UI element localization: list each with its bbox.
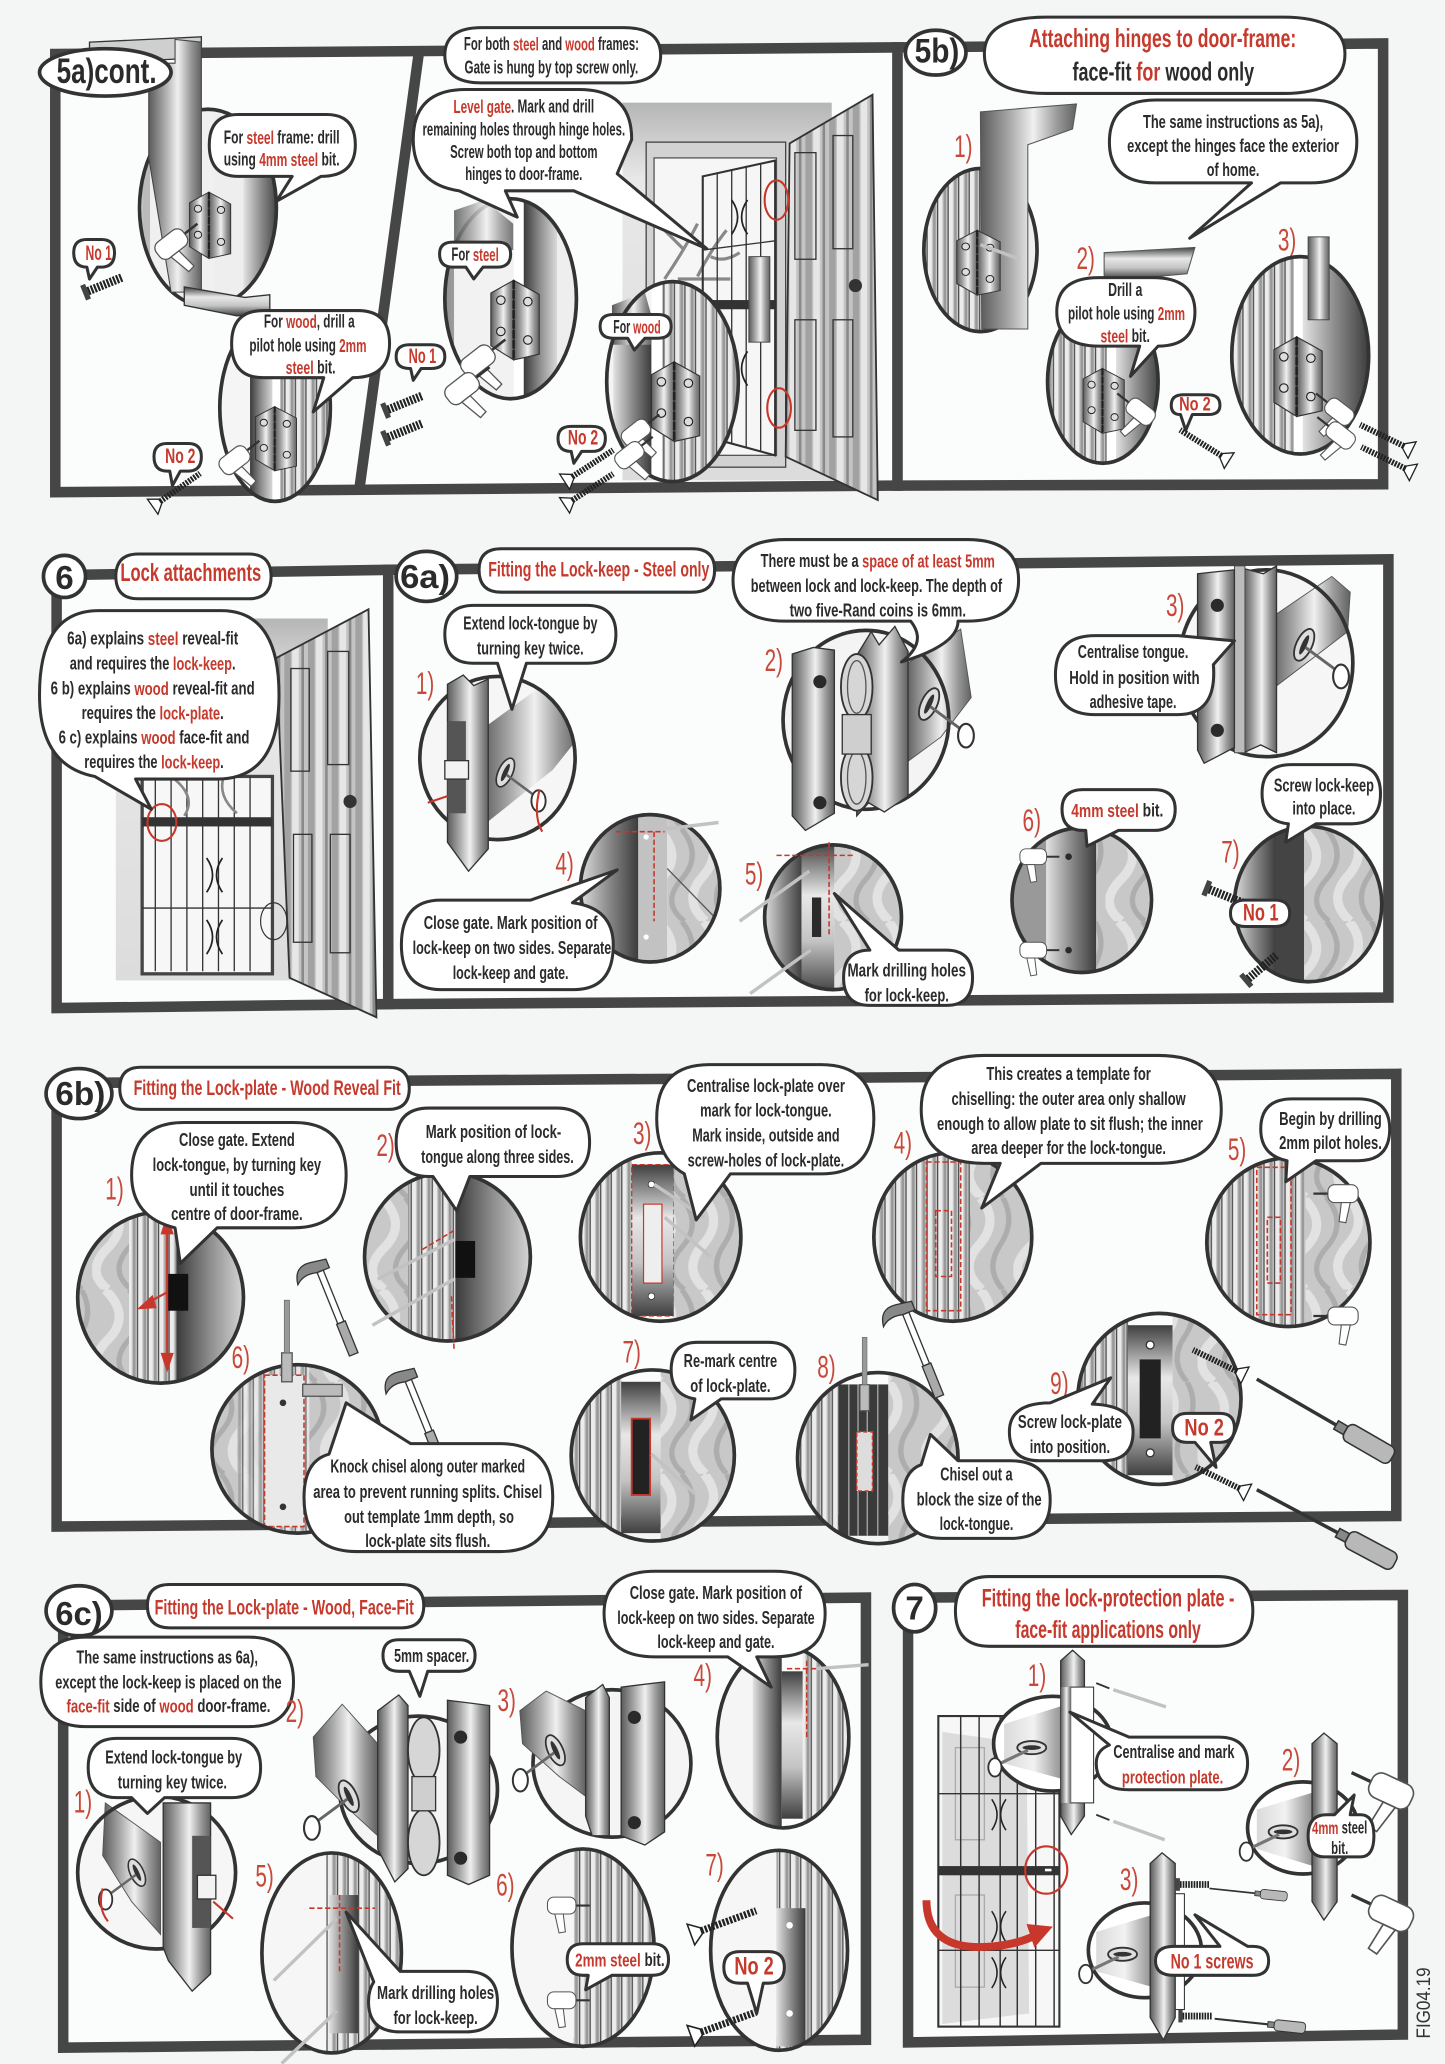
callout: mark drilling holes: Mark drilling holes	[377, 1982, 494, 2003]
badge: 5b: 5b)	[915, 32, 959, 70]
title: fitting the lock-plate face-fit	[147, 1584, 424, 1628]
callout: centralise lock-plate: Mark inside, outside and	[692, 1125, 840, 1146]
callout: extend lock-tongue	[445, 605, 616, 709]
callout: 5mm spacer: 5mm spacer.	[394, 1645, 469, 1666]
step 6 number: 6)	[1023, 802, 1041, 838]
step 6 number: 6)	[496, 1866, 515, 1902]
icon: No 1 screws and callout	[380, 345, 445, 447]
lens: steel frame hinge	[90, 37, 290, 316]
callout: steel frame drill	[209, 114, 355, 201]
label: for steel	[440, 242, 511, 279]
callout: close gate mark: lock-keep on two sides. Separate	[413, 937, 611, 958]
step 2 number: 2)	[286, 1693, 304, 1729]
callout: same instructions: The same instructions as 5a),	[1143, 111, 1323, 132]
callout: wood frame drill: pilot hole using 2mm	[249, 334, 367, 355]
callout: explains 6a 6b 6c: 6a) explains steel reveal-fit	[67, 628, 238, 649]
lens: 6b step 3	[579, 1151, 745, 1323]
callout: close gate mark: Close gate. Mark position of	[630, 1582, 803, 1603]
callout: begin by drilling: 2mm pilot holes.	[1279, 1132, 1382, 1153]
callout: screw lock-keep: into place.	[1292, 798, 1355, 819]
step 2 number: 2)	[1077, 240, 1095, 276]
callout: re-mark centre: of lock-plate.	[690, 1375, 771, 1396]
callout: close gate mark: lock-keep and gate.	[657, 1631, 774, 1652]
callout: same instructions as 6a: face-fit side of wood door-frame.	[66, 1695, 270, 1716]
callout: creates a template: enough to allow plate to sit flush; the inner	[937, 1113, 1203, 1134]
step 5 number: 5)	[255, 1857, 274, 1893]
step 3 number: 3)	[1278, 222, 1296, 258]
callout: same instructions as 6a: except the lock-keep is placed on the	[55, 1671, 282, 1692]
callout: level gate	[413, 89, 707, 249]
callout: close gate mark	[604, 1571, 825, 1687]
title: fitting lock-protection plate: Fitting the lock-protection plate -	[982, 1584, 1234, 1612]
callout: extend lock-tongue: Extend lock-tongue by	[463, 613, 598, 634]
lens: 6a step 4	[579, 813, 722, 965]
callout: centralise lock-plate: Centralise lock-plate over	[687, 1075, 845, 1096]
callout: mark drilling holes	[834, 894, 973, 1005]
step 2 number: 2)	[1282, 1741, 1300, 1777]
label: No 2 with pointer: No 2	[1184, 1415, 1224, 1441]
callout: close gate extend: lock-tongue, by turning key	[153, 1154, 322, 1175]
icon: No 1 screw and callout	[74, 240, 125, 300]
callout: 4mm steel bit: 4mm steel bit.	[1071, 799, 1163, 820]
callout: explains 6a 6b 6c: 6 b) explains wood reveal-fit and	[51, 678, 255, 699]
title: fitting lock-protection plate: face-fit applications only	[1015, 1616, 1201, 1644]
lens: 6c step 2 with spacers	[304, 1695, 500, 1884]
label: No 2 with pointer	[1173, 1413, 1234, 1467]
panel: 6 lock attachments	[40, 554, 388, 1017]
callout: close gate extend	[132, 1123, 346, 1263]
lens: step 3 with screwdrivers	[1079, 1853, 1306, 2040]
red markers on top and bottom hinges	[765, 180, 791, 428]
callout: creates a template: area deeper for the lock-tongue.	[971, 1137, 1166, 1158]
callout: centralise tongue: Hold in position with	[1069, 667, 1200, 688]
lens: wood frame hinge	[218, 348, 332, 504]
step 1 number: 1)	[74, 1784, 92, 1820]
lens: wood frame hinges	[603, 279, 745, 487]
step 5 number: 5)	[1228, 1131, 1246, 1167]
callout: centralise and mark	[1070, 1712, 1248, 1790]
callout: chisel out a block: lock-tongue.	[940, 1513, 1013, 1534]
callout: screw lock-plate	[1009, 1378, 1133, 1461]
callout: centralise and mark: protection plate.	[1122, 1766, 1223, 1787]
panel: 6c lock-plate wood face-fit	[41, 1571, 869, 2063]
callout: extend lock-tongue: Extend lock-tongue by	[105, 1746, 243, 1767]
label: for wood: For wood	[613, 316, 661, 337]
step 7 number: 7)	[1221, 833, 1240, 869]
callout: extend lock-tongue	[88, 1738, 261, 1813]
lens: steel frame hinges	[441, 197, 580, 427]
lens: step 1 lock with plate	[988, 1650, 1166, 1840]
lens: 6c step 5	[261, 1849, 405, 2063]
callout: centralise lock-plate: mark for lock-tongue.	[700, 1100, 832, 1121]
callout: 4mm steel bit: bit.	[1331, 1839, 1348, 1858]
callout: No 2	[724, 1952, 784, 2013]
step 3 number: 3)	[1166, 587, 1184, 623]
panel: 7 lock-protection plate	[894, 1577, 1417, 2042]
callout: No 1 screws: No 1 screws	[1171, 1950, 1254, 1973]
icon: two drills	[1313, 1185, 1358, 1345]
callout: mark position	[396, 1108, 590, 1211]
callout: same instructions	[1109, 100, 1357, 238]
callout: explains 6a 6b 6c: and requires the lock-keep.	[70, 653, 236, 674]
title: fitting lock-protection plate	[955, 1577, 1253, 1646]
title: fitting the lock-plate: Fitting the Lock-plate - Wood Reveal Fit	[134, 1077, 401, 1100]
callout: explains 6a 6b 6c: 6 c) explains wood face-fit and	[59, 726, 249, 747]
callout: same instructions: except the hinges face the exterior	[1127, 135, 1339, 156]
callout: 2mm steel bit: 2mm steel bit.	[575, 1949, 665, 1970]
title: fitting the lock-plate	[120, 1067, 409, 1109]
lens: 6b step 7	[569, 1369, 737, 1542]
callout: No 2: No 2	[734, 1953, 774, 1981]
step 4 number: 4)	[694, 1657, 712, 1693]
badge: 6: 6	[55, 559, 74, 596]
step 4 number: 4)	[894, 1124, 912, 1160]
lens: 6a step 1	[415, 671, 579, 871]
callout: centralise tongue	[1055, 636, 1234, 715]
step 1 number: 1)	[1028, 1657, 1046, 1693]
callout: centralise and mark: Centralise and mark	[1113, 1741, 1235, 1762]
callout: 5mm spacer	[383, 1640, 475, 1696]
icon: No 2 screw and callout: No 2	[165, 445, 195, 468]
callout: re-mark centre	[671, 1342, 795, 1420]
icon: No 2 screw and callout: No 2	[1179, 394, 1211, 416]
callout: extend lock-tongue: turning key twice.	[477, 638, 584, 659]
badge: 6b	[46, 1069, 112, 1119]
callout: knock chisel: area to prevent running splits. Chisel	[313, 1481, 542, 1502]
callout: drill pilot hole: Drill a	[1108, 279, 1143, 300]
icon: hammer and chisel	[860, 1299, 948, 1411]
step 3 number: 3)	[633, 1115, 651, 1151]
badge: 6a: 6a)	[400, 558, 450, 595]
icon: No 1 screws and callout: No 1	[409, 345, 436, 368]
callout: explains 6a 6b 6c	[40, 611, 279, 809]
label: for wood	[600, 315, 671, 350]
callout: mark drilling holes	[346, 1912, 497, 2032]
lens: 6b step 4	[873, 1151, 1036, 1323]
badge: 7: 7	[905, 1590, 924, 1627]
step 7 number: 7)	[622, 1334, 641, 1370]
callout: centralise tongue: adhesive tape.	[1090, 691, 1177, 712]
lens: 6a step 2 with coins	[783, 626, 974, 830]
step 1 number: 1)	[105, 1170, 124, 1206]
lens: 6c step 4	[715, 1651, 869, 1830]
callout: knock chisel	[304, 1403, 553, 1552]
icon: No 2 screws and callout	[558, 426, 618, 513]
callout: close gate mark: lock-keep on two sides. Separate	[617, 1607, 815, 1628]
callout: wood frame drill: For wood, drill a	[264, 311, 355, 332]
callout: close gate extend: Close gate. Extend	[179, 1129, 295, 1150]
callout: both frames: For both steel and wood frames:	[464, 33, 639, 54]
step 2 number: 2)	[376, 1127, 395, 1163]
illustration: door with gate	[116, 609, 376, 1017]
callout: level gate: remaining holes through hinge holes.	[422, 118, 625, 139]
callout: extend lock-tongue: turning key twice.	[118, 1771, 227, 1792]
callout: 4mm steel bit	[1062, 790, 1175, 846]
callout: creates a template: chiselling: the outer area only shallow	[951, 1088, 1186, 1109]
lens: 6c step 3	[513, 1682, 695, 1845]
callout: level gate: Level gate. Mark and drill	[453, 95, 594, 116]
callout: mark position: tongue along three sides.	[421, 1146, 574, 1167]
callout: wood frame drill	[232, 311, 390, 412]
callout: space of at least 5mm: two five-Rand coins is 6mm.	[790, 599, 966, 620]
callout: same instructions as 6a	[41, 1637, 293, 1727]
title: lock attachments: Lock attachments	[120, 559, 261, 587]
badge: 6a	[396, 551, 457, 601]
callout: drill pilot hole: pilot hole using 2mm	[1068, 303, 1185, 324]
icon: hammer and chisels	[282, 1256, 451, 1473]
callout: same instructions: of home.	[1207, 159, 1259, 180]
lens: step 2 with drills	[1240, 1733, 1417, 1962]
callout: both frames	[445, 28, 661, 83]
lens: 6b step 9	[1077, 1312, 1244, 1486]
callout: both frames: Gate is hung by top screw only.	[465, 57, 638, 78]
callout: centralise lock-plate	[657, 1065, 874, 1220]
step 9 number: 9)	[1050, 1365, 1069, 1401]
callout: explains 6a 6b 6c: requires the lock-plate.	[82, 702, 224, 723]
title: attaching hinges: Attaching hinges to door-frame:	[1029, 23, 1296, 53]
step 3 number: 3)	[497, 1682, 516, 1718]
title: attaching hinges: face-fit for wood only	[1073, 57, 1254, 87]
callout: begin by drilling	[1261, 1099, 1390, 1182]
lens: 6b step 5	[1205, 1155, 1371, 1329]
panel: 6b lock-plate wood reveal fit	[46, 1055, 1399, 1571]
callout: close gate mark	[401, 870, 617, 990]
badge: 6c: 6c)	[55, 1595, 103, 1632]
callout: mark position: Mark position of lock-	[426, 1121, 561, 1142]
step 2 number: 2)	[765, 642, 783, 678]
title: attaching hinges	[984, 17, 1345, 93]
panel: 6a lock-keep steel	[388, 540, 1388, 1005]
callout: knock chisel: out template 1mm depth, so	[344, 1506, 514, 1527]
lens: 6c step 7	[708, 1848, 850, 2053]
step 5 number: 5)	[745, 855, 763, 891]
callout: space of at least 5mm: There must be a space of at least 5mm	[761, 550, 995, 571]
icon: No 2 screws	[687, 1900, 760, 2046]
label: for steel: For steel	[451, 243, 499, 264]
step 1 number: 1)	[416, 665, 434, 701]
callout: creates a template	[921, 1055, 1221, 1208]
badge: 6	[43, 555, 86, 597]
callout: mark drilling holes: for lock-keep.	[394, 2007, 478, 2028]
lens: 6b step 6 with chisel	[211, 1362, 383, 1540]
callout: centralise lock-plate: screw-holes of lock-plate.	[688, 1150, 844, 1171]
icon: two wood screws	[1356, 416, 1417, 481]
callout: mark drilling holes: for lock-keep.	[865, 984, 949, 1005]
panel: 5b	[898, 17, 1417, 486]
callout: mark drilling holes: Mark drilling holes	[848, 959, 966, 980]
title: lock attachments	[116, 554, 271, 599]
step 8 number: 8)	[817, 1349, 836, 1385]
badge: 6b: 6b)	[55, 1075, 105, 1112]
lens: 6c step 6	[511, 1846, 658, 2050]
callout: begin by drilling: Begin by drilling	[1279, 1108, 1382, 1129]
title: fitting the lock-keep	[479, 549, 715, 592]
callout: knock chisel: lock-plate sits flush.	[365, 1530, 490, 1551]
step 3 number: 3)	[1120, 1861, 1138, 1897]
callout: space of at least 5mm: between lock and lock-keep. The depth of	[751, 575, 1003, 596]
panel badge: 5a cont: 5a)cont.	[57, 51, 157, 91]
step 1 number: 1)	[954, 128, 973, 164]
callout: knock chisel: Knock chisel along outer marked	[330, 1456, 525, 1477]
callout: chisel out a block: block the size of the	[917, 1488, 1042, 1509]
panel badge: 5a cont	[40, 49, 171, 96]
callout: chisel out a block	[903, 1434, 1050, 1538]
lens: 6b step 1	[76, 1211, 245, 1388]
icon: No 2 screw and callout	[147, 443, 205, 514]
callout: drill pilot hole: steel bit.	[1101, 325, 1150, 346]
lens: 6a step 5	[740, 842, 903, 994]
title: fitting the lock-keep: Fitting the Lock-keep - Steel only	[488, 558, 710, 581]
callout: chisel out a block: Chisel out a	[940, 1463, 1013, 1484]
callout: close gate extend: until it touches	[190, 1179, 284, 1200]
callout: close gate extend: centre of door-frame.	[171, 1203, 303, 1224]
callout: wood frame drill: steel bit.	[286, 357, 336, 378]
lens: 5b step 1	[921, 104, 1077, 336]
lens: 6a step 6	[1011, 826, 1154, 976]
illustration: open door with gate	[622, 95, 878, 500]
callout: close gate mark: Close gate. Mark position of	[424, 912, 598, 933]
title: fitting the lock-plate face-fit: Fitting the Lock-plate - Wood, Face-Fit	[155, 1597, 414, 1620]
callout: 4mm steel bit	[1308, 1795, 1374, 1858]
callout: space of at least 5mm	[733, 540, 1019, 662]
lens: 6a step 7	[1201, 824, 1383, 988]
callout: screw lock-plate: Screw lock-plate	[1018, 1411, 1122, 1432]
step 4 number: 4)	[555, 845, 574, 881]
callout: centralise tongue: Centralise tongue.	[1078, 641, 1188, 662]
callout: 2mm steel bit	[567, 1944, 669, 1990]
callout: re-mark centre: Re-mark centre	[684, 1350, 777, 1371]
panel: 5a continued	[40, 28, 898, 514]
lens: 6a step 3	[1178, 566, 1362, 763]
callout: creates a template: This creates a template for	[986, 1063, 1151, 1084]
callout: steel frame drill: using 4mm steel bit.	[224, 149, 340, 170]
callout: explains 6a 6b 6c: requires the lock-keep.	[84, 751, 224, 772]
illustration: gate with swing arrow	[926, 1716, 1067, 2027]
callout: drill pilot hole	[1057, 278, 1195, 376]
icon: screws and screwdrivers	[1189, 1342, 1399, 1571]
step 7 number: 7)	[705, 1847, 724, 1883]
icon: No 2 screws and callout: No 2	[568, 427, 598, 450]
callout: screw lock-plate: into position.	[1030, 1436, 1110, 1457]
step 6 number: 6)	[232, 1339, 250, 1375]
callout: steel frame drill: For steel frame: drill	[224, 126, 340, 147]
callout: level gate: Screw both top and bottom	[450, 141, 597, 162]
lens: 6b step 8	[796, 1371, 961, 1545]
badge: 6c	[46, 1586, 112, 1636]
lens: 5b step 2	[1046, 247, 1195, 465]
label: No 1: No 1	[1243, 900, 1279, 926]
badge: 7	[894, 1584, 936, 1632]
lens: 6b step 2	[363, 1171, 532, 1349]
callout: No 1 screws	[1155, 1915, 1269, 1975]
figure reference label: FIG04.19	[1413, 1967, 1435, 2038]
callout: screw lock-keep: Screw lock-keep	[1274, 774, 1374, 795]
callout: level gate: hinges to door-frame.	[465, 163, 582, 184]
callout: 4mm steel bit: 4mm steel	[1312, 1818, 1367, 1837]
icon: No 2 screw and callout	[1171, 394, 1234, 468]
lens: 6c step 1	[76, 1794, 240, 1991]
lens: 5b step 3	[1230, 237, 1369, 468]
callout: close gate mark: lock-keep and gate.	[453, 962, 569, 983]
callout: same instructions as 6a: The same instructions as 6a),	[76, 1646, 258, 1667]
callout: screw lock-keep	[1262, 765, 1380, 842]
icon: No 1 screw and callout: No 1	[86, 242, 112, 265]
